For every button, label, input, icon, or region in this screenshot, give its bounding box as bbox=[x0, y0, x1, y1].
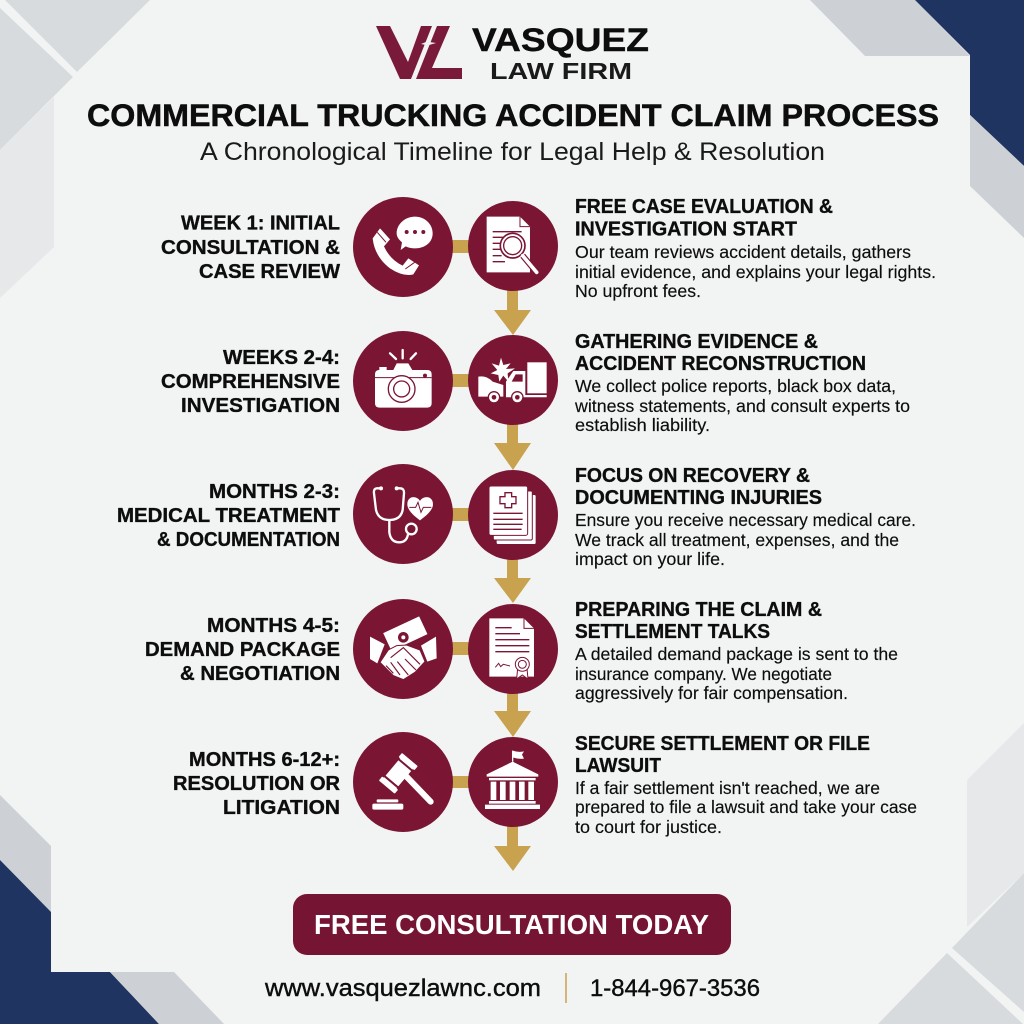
step 4 description: PREPARING THE CLAIM & bbox=[575, 599, 822, 621]
icon: courthouse bbox=[468, 737, 558, 827]
icon: document with magnifier bbox=[468, 201, 558, 291]
step 4 description: insurance company. We negotiate bbox=[575, 664, 832, 684]
step 5 label: MONTHS 6-12+: bbox=[189, 749, 340, 771]
subtitle: A Chronological Timeline for Legal Help & Resolution bbox=[200, 138, 825, 166]
step 1 description: Our team reviews accident details, gathers bbox=[575, 242, 911, 262]
step 4 bbox=[145, 599, 898, 703]
step 2 bbox=[161, 331, 910, 435]
logo bbox=[376, 22, 649, 84]
step 2 label: COMPREHENSIVE bbox=[161, 371, 340, 393]
step 4 label bbox=[145, 615, 340, 685]
firm name bbox=[472, 22, 649, 84]
icon: stethoscope and heart bbox=[353, 464, 453, 564]
icon: gavel bbox=[353, 732, 453, 832]
step 3 description: Ensure you receive necessary medical care. bbox=[575, 510, 916, 530]
step 4 description: aggressively for fair compensation. bbox=[575, 683, 848, 703]
step 3 description: DOCUMENTING INJURIES bbox=[575, 487, 822, 509]
step 1 label bbox=[161, 212, 340, 283]
step 4 label: MONTHS 4-5: bbox=[207, 615, 340, 637]
step 3 description bbox=[575, 465, 916, 569]
icon: medical records bbox=[468, 470, 558, 560]
step 3 label bbox=[117, 481, 340, 551]
step 1 description: INVESTIGATION START bbox=[575, 218, 797, 240]
step 1 description: No upfront fees. bbox=[575, 281, 701, 301]
step 3 label: MONTHS 2-3: bbox=[209, 481, 340, 503]
step 5 description bbox=[575, 733, 917, 837]
title: COMMERCIAL TRUCKING ACCIDENT CLAIM PROCESS bbox=[87, 97, 939, 133]
step 5 description: SECURE SETTLEMENT OR FILE bbox=[575, 733, 870, 755]
step 4 description bbox=[575, 599, 898, 703]
icon: contract with seal bbox=[468, 604, 558, 694]
step 1 label: WEEK 1: INITIAL bbox=[181, 212, 340, 234]
step 1 bbox=[161, 196, 936, 301]
step 5 label: RESOLUTION OR bbox=[173, 773, 341, 795]
logo mark bbox=[376, 26, 462, 79]
step 2 description: establish liability. bbox=[575, 415, 710, 435]
step 3 description: We track all treatment, expenses, and the bbox=[575, 530, 899, 550]
step 3 label: MEDICAL TREATMENT bbox=[117, 505, 340, 527]
step 3 description: impact on your life. bbox=[575, 549, 725, 569]
step 4 label: & NEGOTIATION bbox=[180, 663, 340, 685]
step 1 description: initial evidence, and explains your legal rights. bbox=[575, 262, 936, 282]
step 5 description: If a fair settlement isn't reached, we are bbox=[575, 778, 880, 798]
icon: phone and chat bubble bbox=[353, 197, 453, 297]
footer contact details: 1-844-967-3536 bbox=[590, 975, 760, 1002]
call to action button bbox=[293, 894, 731, 955]
footer contact details: www.vasquezlawnc.com bbox=[264, 975, 541, 1002]
step 2 description bbox=[574, 331, 910, 435]
step 1 label: CONSULTATION & bbox=[161, 237, 340, 259]
step 2 label: INVESTIGATION bbox=[181, 395, 340, 417]
step 5 description: LAWSUIT bbox=[575, 755, 661, 777]
step 5 description: to court for justice. bbox=[575, 817, 722, 837]
step 4 description: A detailed demand package is sent to the bbox=[575, 644, 898, 664]
step 5 label bbox=[173, 749, 341, 819]
call to action button: FREE CONSULTATION TODAY bbox=[314, 909, 709, 940]
firm name: VASQUEZ bbox=[472, 22, 649, 58]
step 1 description: FREE CASE EVALUATION & bbox=[575, 196, 833, 218]
step 2 label bbox=[161, 347, 340, 417]
step 5 label: LITIGATION bbox=[223, 797, 340, 819]
step 5 description: prepared to file a lawsuit and take your case bbox=[575, 797, 917, 817]
step 1 label: CASE REVIEW bbox=[199, 261, 340, 283]
step 4 label: DEMAND PACKAGE bbox=[145, 639, 340, 661]
step 2 description: witness statements, and consult experts to bbox=[574, 396, 910, 416]
firm name: LAW FIRM bbox=[490, 58, 632, 84]
icon: camera bbox=[353, 331, 453, 431]
step 5 bbox=[173, 732, 917, 837]
connectors and arrows bbox=[450, 240, 531, 871]
step 3 bbox=[117, 464, 916, 569]
step 3 label: & DOCUMENTATION bbox=[157, 529, 340, 551]
step 2 description: GATHERING EVIDENCE & bbox=[575, 331, 818, 353]
footer contact details bbox=[264, 973, 760, 1003]
step 3 description: FOCUS ON RECOVERY & bbox=[575, 465, 810, 487]
icon: handshake with money bbox=[353, 599, 453, 699]
step 2 label: WEEKS 2-4: bbox=[223, 347, 340, 369]
icon: truck collision bbox=[468, 335, 558, 425]
step 2 description: We collect police reports, black box data, bbox=[575, 376, 896, 396]
step 4 description: SETTLEMENT TALKS bbox=[575, 621, 770, 643]
step 2 description: ACCIDENT RECONSTRUCTION bbox=[575, 353, 866, 375]
step 1 description bbox=[575, 196, 936, 301]
